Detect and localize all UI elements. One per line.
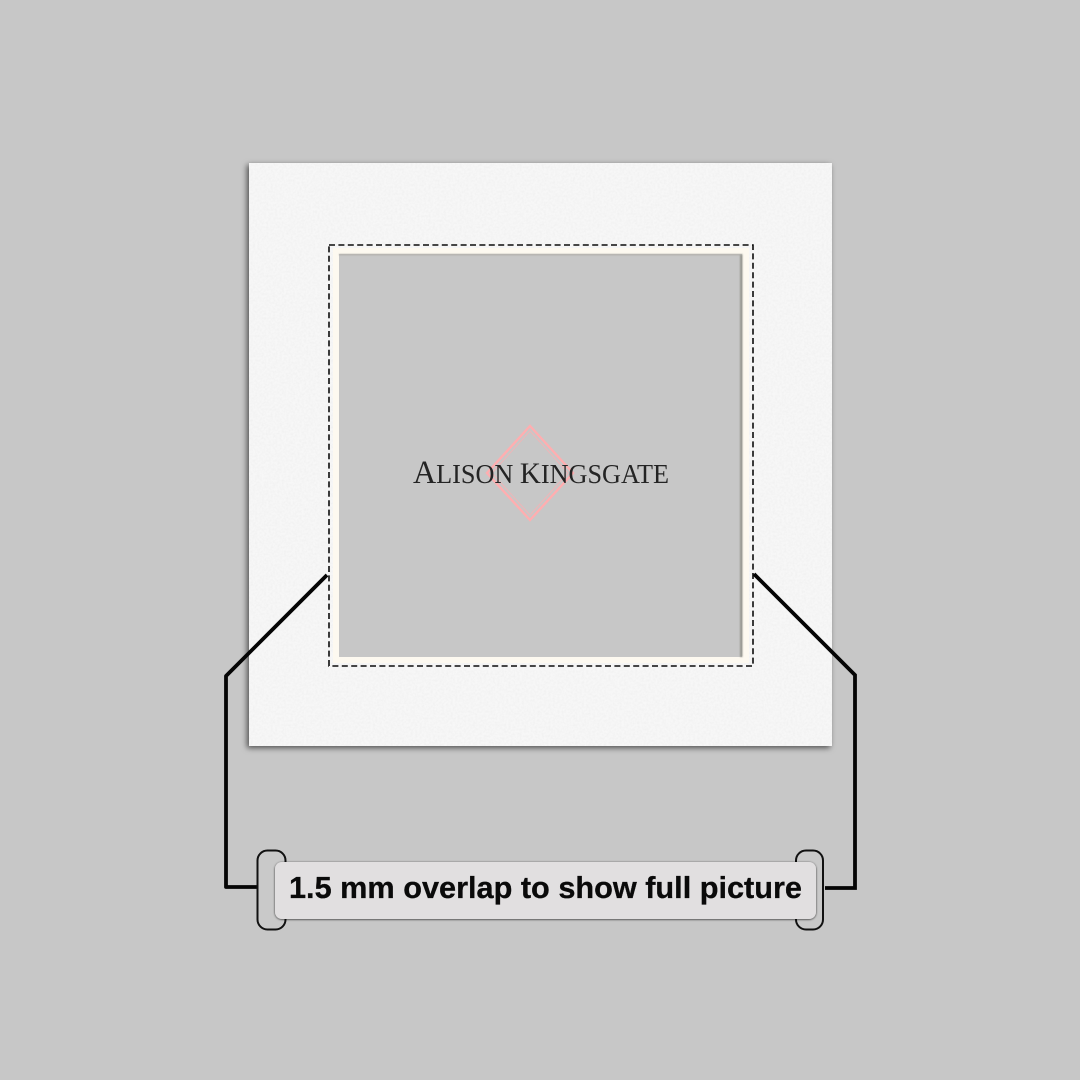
infographic canvas [224,161,857,930]
label text: 1.5 mm overlap to show full picture [289,870,802,905]
paper texture [249,163,832,746]
logo wordmark: ALISON KINGSGATE [413,455,669,491]
dashed cut line [329,245,753,666]
logo: Alison Kingsgate [413,426,669,520]
logo diamond [487,426,573,520]
label box [275,862,816,919]
panel: white mount board with window [249,163,832,746]
cream bevel around window [333,248,749,663]
right bracket tab [796,850,823,930]
arrow: left leader line [226,575,327,887]
window inner shadow [339,254,742,657]
mount board [249,163,832,746]
left bracket tab [258,850,286,930]
arrow: right leader line [754,574,855,888]
window opening [339,254,742,657]
callout label [275,862,816,919]
